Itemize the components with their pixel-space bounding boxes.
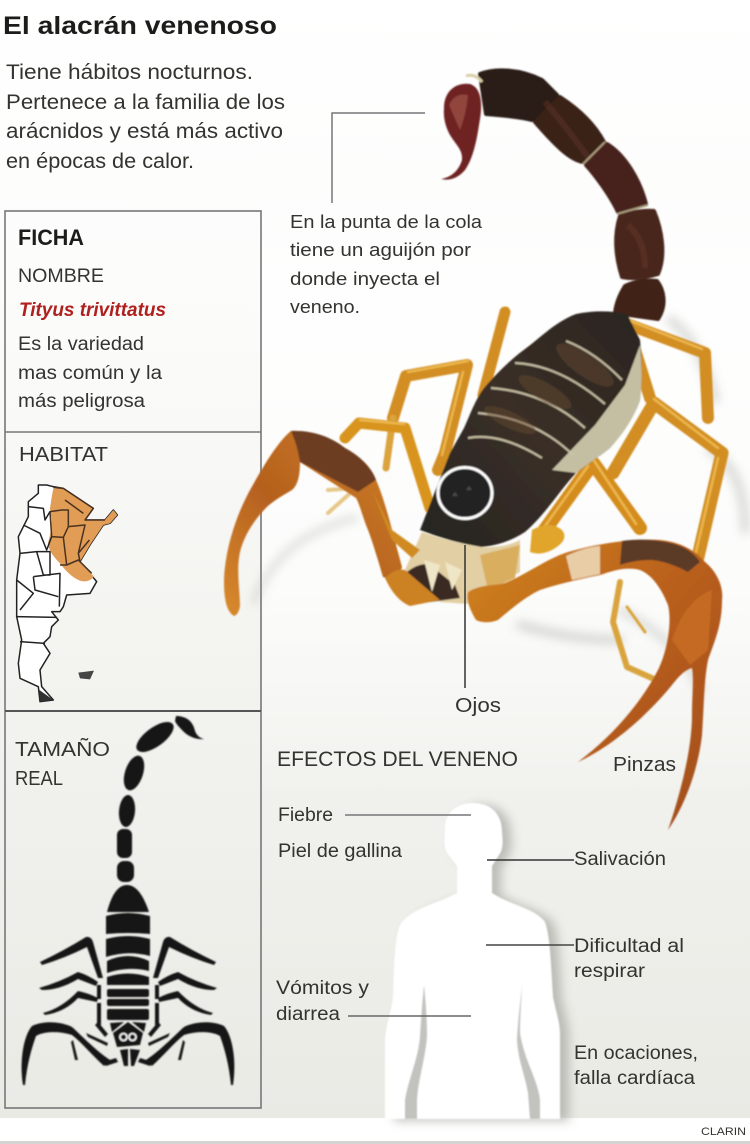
intro text block: en épocas de calor. bbox=[6, 149, 194, 173]
left claw bbox=[224, 431, 402, 616]
symptom: falla cardíaca bbox=[574, 1043, 698, 1089]
callout: stinger text: En la punta de la cola bbox=[290, 211, 483, 232]
symptom: vómitos y diarrea: diarrea bbox=[276, 1004, 340, 1025]
panel: ficha text: NOMBRE bbox=[18, 266, 104, 287]
panel: ficha text: FICHA bbox=[18, 225, 84, 250]
heading: tamaño real bbox=[15, 737, 110, 790]
heading: habitat: HABITAT bbox=[19, 444, 108, 466]
symptom: vómitos y diarrea bbox=[276, 978, 471, 1025]
abdomen pale flank bbox=[552, 345, 642, 473]
photo shadows bbox=[254, 320, 745, 690]
panel: ficha frame bbox=[5, 211, 261, 1108]
panel: ficha text: mas común y la bbox=[18, 363, 162, 384]
arrow: stinger leader line bbox=[332, 113, 425, 203]
callout: stinger text: donde inyecta el bbox=[290, 268, 440, 289]
tail segments bbox=[466, 70, 664, 319]
photo: scorpion bbox=[224, 70, 745, 830]
intro text block bbox=[6, 60, 285, 173]
panel: ficha text bbox=[18, 225, 166, 412]
symptom: salivación: Salivación bbox=[574, 849, 666, 870]
panel: ficha text: Tityus trivittatus bbox=[19, 300, 166, 321]
right claw bbox=[467, 540, 722, 830]
label: ojos: Ojos bbox=[455, 695, 501, 717]
symptom: dificultad al respirar: Dificultad al bbox=[574, 936, 684, 957]
map: Argentina habitat bbox=[17, 485, 117, 702]
panel: ficha text: Es la variedad bbox=[18, 334, 144, 355]
abdomen stripes bbox=[468, 341, 622, 458]
symptom: dificultad al respirar bbox=[486, 936, 684, 982]
abdomen bbox=[420, 311, 642, 547]
stinger bbox=[441, 84, 481, 180]
panel: ficha text: más peligrosa bbox=[18, 391, 145, 412]
title: El alacrán venenoso bbox=[3, 12, 277, 40]
arrow: eyes leader line bbox=[464, 545, 466, 688]
callout: stinger text: veneno. bbox=[290, 296, 360, 317]
heading: tamaño real: TAMAÑO bbox=[15, 737, 110, 761]
heading: tamaño real: REAL bbox=[15, 768, 63, 790]
symptom: piel de gallina: Piel de gallina bbox=[278, 841, 402, 862]
figure: human silhouette bbox=[385, 803, 569, 1121]
mouth parts bbox=[404, 532, 520, 604]
icon: black scorpion silhouette real size bbox=[22, 716, 234, 1085]
symptom: falla cardíaca: falla cardíaca bbox=[574, 1068, 695, 1089]
front legs over body bbox=[530, 525, 564, 554]
callout: stinger text: tiene un aguijón por bbox=[290, 239, 471, 260]
symptom: dificultad al respirar: respirar bbox=[574, 961, 646, 982]
credit: CLARIN bbox=[701, 1126, 746, 1138]
label: pinzas: Pinzas bbox=[613, 754, 676, 776]
leg highlights bbox=[360, 320, 718, 552]
symptom: falla cardíaca: En ocaciones, bbox=[574, 1043, 698, 1064]
symptom: vómitos y diarrea: Vómitos y bbox=[276, 978, 370, 999]
intro text block: arácnidos y está más activo bbox=[6, 119, 283, 143]
intro text block: Tiene hábitos nocturnos. bbox=[6, 60, 253, 84]
symptom: fiebre: Fiebre bbox=[278, 805, 333, 826]
back legs bbox=[328, 312, 722, 679]
eyes ring bbox=[438, 468, 492, 518]
callout: stinger text bbox=[290, 211, 483, 317]
intro text block: Pertenece a la familia de los bbox=[6, 90, 285, 114]
heading: efectos del veneno: EFECTOS DEL VENENO bbox=[277, 748, 518, 771]
